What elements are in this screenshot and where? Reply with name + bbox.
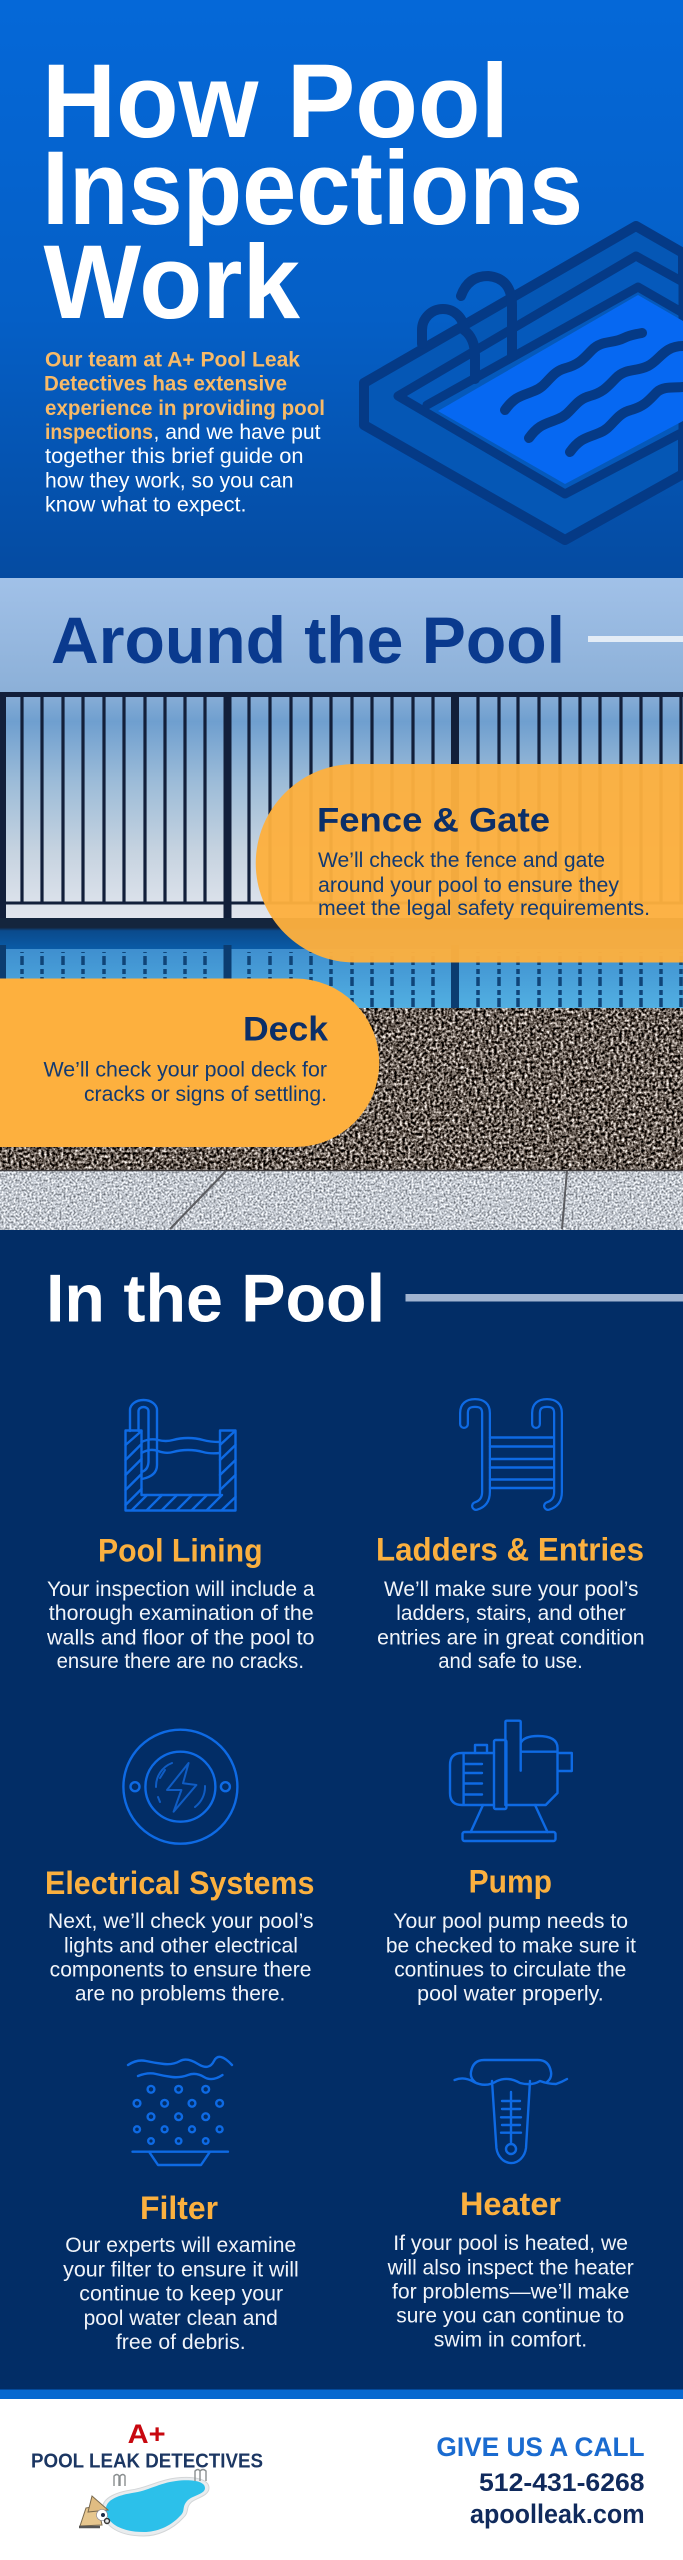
callout: fence and gate: meet the legal safety requirements. — [318, 897, 650, 920]
panel: around the pool — [0, 578, 683, 1230]
logo: A+ Pool Leak Detectives: POOL LEAK DETECTIVES — [31, 2450, 263, 2472]
intro paragraph: , and we have put — [154, 421, 321, 444]
description: and safe to use. — [438, 1650, 583, 1673]
callout: deck: Deck — [243, 1010, 328, 1048]
intro paragraph: Detectives has extensive — [44, 372, 287, 396]
description: ensure there are no cracks. — [57, 1650, 304, 1673]
logo pool — [102, 2477, 209, 2536]
logo water — [106, 2480, 205, 2532]
description: pool water properly. — [417, 1982, 604, 2006]
description: thorough examination of the — [49, 1602, 314, 1625]
description: Your inspection will include a — [47, 1578, 315, 1601]
description: continues to circulate the — [394, 1958, 626, 1982]
item: pool lining — [46, 1400, 315, 1673]
heading: Pool Lining — [98, 1532, 263, 1568]
icon: isometric swimming pool — [364, 226, 683, 540]
contact block: 512-431-6268 — [479, 2469, 645, 2497]
description: pool water clean and — [84, 2307, 278, 2330]
icon: pool ladder — [464, 1403, 558, 1506]
description — [48, 1910, 314, 2006]
description: components to ensure there — [50, 1958, 311, 1982]
contact block: apoolleak.com — [470, 2499, 645, 2529]
description — [377, 1578, 645, 1673]
callout: deck: We’ll check your pool deck for — [44, 1058, 327, 1082]
heading: Filter — [140, 2190, 218, 2226]
heading: Ladders & Entries — [376, 1532, 644, 1568]
item: filter — [63, 2057, 299, 2354]
intro paragraph: know what to expect. — [45, 494, 246, 516]
icon: pool thermometer — [455, 2060, 567, 2163]
intro paragraph: Our team at A+ Pool Leak — [45, 348, 300, 372]
logo: A+ Pool Leak Detectives: A+ — [128, 2419, 166, 2449]
title: How Pool — [42, 43, 509, 160]
heading: in the pool: In the Pool — [46, 1260, 385, 1336]
item: ladders and entries — [376, 1403, 645, 1673]
title: Inspections — [42, 130, 583, 247]
logo: A+ Pool Leak Detectives — [31, 2419, 263, 2536]
description: We’ll make sure your pool’s — [384, 1578, 638, 1601]
panel: footer — [0, 2390, 683, 2560]
callout: deck — [0, 978, 379, 1147]
item: pump — [386, 1721, 636, 2006]
item: heater — [387, 2060, 634, 2352]
callout: fence and gate — [256, 764, 683, 962]
description — [386, 1910, 636, 2006]
callout: fence and gate: around your pool to ensure they — [318, 874, 619, 897]
description: are no problems there. — [75, 1982, 285, 2006]
description: walls and floor of the pool to — [46, 1626, 315, 1650]
item: electrical systems — [45, 1730, 314, 2006]
description: ladders, stairs, and other — [396, 1602, 626, 1625]
intro paragraph: together this brief guide on — [45, 445, 304, 468]
callout: deck: cracks or signs of settling. — [84, 1083, 327, 1106]
intro paragraph: how they work, so you can — [45, 470, 294, 492]
photo: fence, pool and deck — [0, 578, 683, 1230]
heading: Heater — [460, 2186, 561, 2222]
description: lights and other electrical — [64, 1934, 298, 1958]
description: Our experts will examine — [65, 2234, 296, 2257]
heading: Electrical Systems — [45, 1865, 314, 1901]
heading: Pump — [469, 1864, 552, 1900]
description: Your pool pump needs to — [393, 1910, 628, 1933]
heading rule — [588, 636, 683, 642]
contact block: GIVE US A CALL — [436, 2432, 645, 2462]
description: your filter to ensure it will — [63, 2258, 299, 2282]
logo mascot — [79, 2496, 110, 2527]
description: for problems—we’ll make — [392, 2280, 629, 2303]
callout: fence and gate: We’ll check the fence and gate — [318, 849, 605, 872]
title: Work — [44, 224, 301, 341]
description: continue to keep your — [79, 2282, 283, 2306]
logo ladders — [114, 2470, 206, 2486]
intro paragraph: experience in providing pool — [45, 397, 325, 420]
panel: in the pool — [0, 1230, 683, 2390]
description: If your pool is heated, we — [393, 2232, 628, 2255]
intro paragraph — [44, 348, 325, 516]
description: be checked to make sure it — [386, 1934, 636, 1958]
description: swim in comfort. — [434, 2329, 587, 2352]
icon: pool filter — [128, 2057, 232, 2165]
heading rule — [406, 1294, 683, 1302]
icon: pool lining — [126, 1400, 236, 1510]
description — [63, 2234, 299, 2354]
description: entries are in great condition — [377, 1626, 645, 1650]
heading: around the pool: Around the Pool — [51, 603, 565, 677]
description: will also inspect the heater — [387, 2256, 634, 2279]
description — [387, 2232, 634, 2352]
callout: fence and gate: Fence & Gate — [317, 802, 550, 840]
description: free of debris. — [116, 2331, 246, 2354]
description: sure you can continue to — [396, 2305, 624, 2328]
title — [42, 43, 583, 341]
intro paragraph: inspections — [45, 421, 153, 444]
panel: hero header — [0, 0, 683, 578]
icon: pool pump — [450, 1721, 572, 1841]
icon: electrical light — [123, 1730, 237, 1844]
description: Next, we’ll check your pool’s — [48, 1910, 314, 1933]
description — [46, 1578, 315, 1673]
contact block — [436, 2432, 645, 2529]
